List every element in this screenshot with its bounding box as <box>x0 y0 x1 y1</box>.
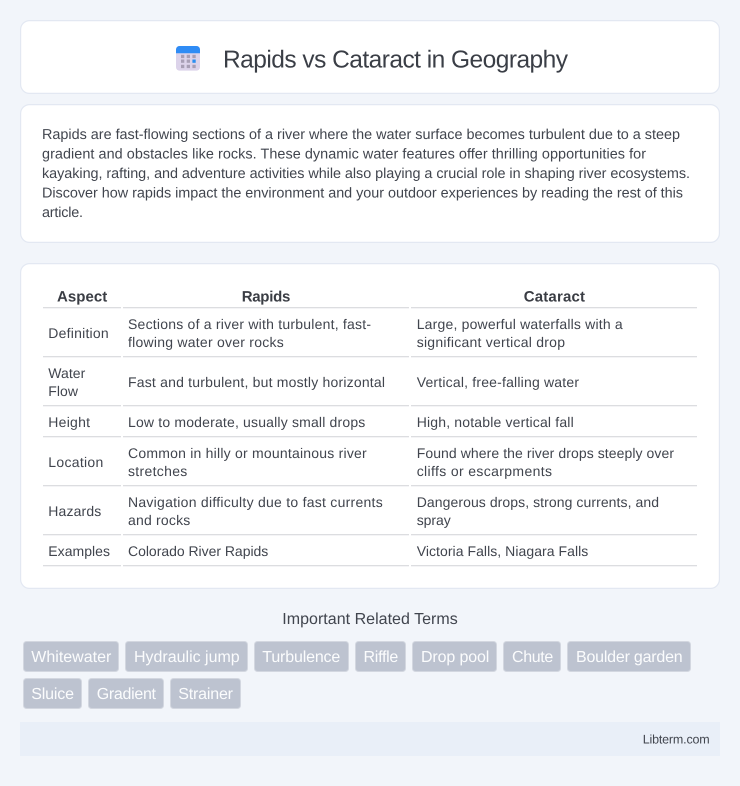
title: Rapids vs Cataract in Geography <box>223 46 569 74</box>
row: height <box>48 414 574 430</box>
row: hazards: Dangerous drops, strong currents, and <box>417 494 659 510</box>
tag: sluice: Sluice <box>31 686 74 703</box>
row: water flow: Water <box>48 365 86 381</box>
tag: strainer <box>170 678 240 708</box>
tag: gradient <box>88 678 164 708</box>
row: location: stretches <box>128 463 187 479</box>
row: location: Found where the river drops steeply over <box>417 445 674 461</box>
tag: turbulence: Turbulence <box>262 649 340 666</box>
tag: chute: Chute <box>512 649 553 666</box>
intro paragraph: article. <box>42 205 83 221</box>
row: examples: Victoria Falls, Niagara Falls <box>417 543 588 559</box>
panel: header <box>21 21 719 93</box>
tag: riffle <box>356 642 406 672</box>
tag: boulder garden: Boulder garden <box>576 649 683 666</box>
row: location: Location <box>48 454 103 470</box>
footer bar: Libterm.com <box>643 732 710 746</box>
row: definition: Large, powerful waterfalls with a <box>417 316 623 332</box>
row: definition: Definition <box>48 325 109 341</box>
table header row: Aspect <box>57 289 107 306</box>
row: definition: significant vertical drop <box>417 334 565 350</box>
footer bar <box>20 722 720 756</box>
tag: drop pool <box>412 642 496 672</box>
row: water flow: Fast and turbulent, but mostly horizontal <box>128 374 385 390</box>
tag: strainer: Strainer <box>178 686 234 703</box>
row: hazards: Hazards <box>48 503 101 519</box>
tag: gradient: Gradient <box>97 686 157 703</box>
row: hazards: and rocks <box>128 512 190 528</box>
row: height: Low to moderate, usually small drops <box>128 414 365 430</box>
intro paragraph: Rapids are fast-flowing sections of a river where the water surface becomes turbulent due to a steep <box>42 127 680 143</box>
tag: whitewater: Whitewater <box>31 649 112 666</box>
table header row <box>57 289 585 306</box>
tag: whitewater <box>24 642 118 672</box>
icon: calendar <box>176 46 200 71</box>
panel: comparison table <box>21 264 719 588</box>
row: definition: flowing water over rocks <box>128 334 284 350</box>
row: location: cliffs or escarpments <box>417 463 552 479</box>
heading: important related terms: Important Related Terms <box>282 611 458 628</box>
table header row: Rapids <box>242 289 290 306</box>
intro paragraph: kayaking, rafting, and adventure activities while also playing a crucial role in shaping river ecosystems. <box>42 166 690 182</box>
tag: riffle: Riffle <box>364 649 398 666</box>
row: hazards: Navigation difficulty due to fast currents <box>128 494 383 510</box>
tag: sluice <box>24 678 82 708</box>
row: water flow: Flow <box>48 383 79 399</box>
tag: hydraulic jump: Hydraulic jump <box>134 649 240 666</box>
row: examples: Examples <box>48 543 110 559</box>
tag: hydraulic jump <box>126 642 248 672</box>
tag: turbulence <box>254 642 348 672</box>
row: examples: Colorado River Rapids <box>128 543 268 559</box>
row: location <box>48 445 674 479</box>
row: water flow <box>48 365 579 399</box>
row: hazards: spray <box>417 512 451 528</box>
related term tags <box>24 642 690 708</box>
row: examples <box>48 543 588 559</box>
intro paragraph: gradient and obstacles like rocks. These dynamic water features offer thrilling opportunities for <box>42 146 646 162</box>
row: location: Common in hilly or mountainous river <box>128 445 367 461</box>
row: water flow: Vertical, free-falling water <box>417 374 579 390</box>
intro paragraph <box>42 127 690 221</box>
intro paragraph: Discover how rapids impact the environment and your outdoor experiences by reading the rest of this <box>42 186 683 202</box>
row: definition <box>48 316 623 350</box>
tag: boulder garden <box>568 642 690 672</box>
tag: drop pool: Drop pool <box>421 649 489 666</box>
row: height: Height <box>48 414 90 430</box>
panel: intro text <box>21 105 719 242</box>
tag: chute <box>504 642 560 672</box>
table header row: Cataract <box>524 289 585 306</box>
row: hazards <box>48 494 659 528</box>
row: definition: Sections of a river with turbulent, fast- <box>128 316 371 332</box>
row: height: High, notable vertical fall <box>417 414 574 430</box>
